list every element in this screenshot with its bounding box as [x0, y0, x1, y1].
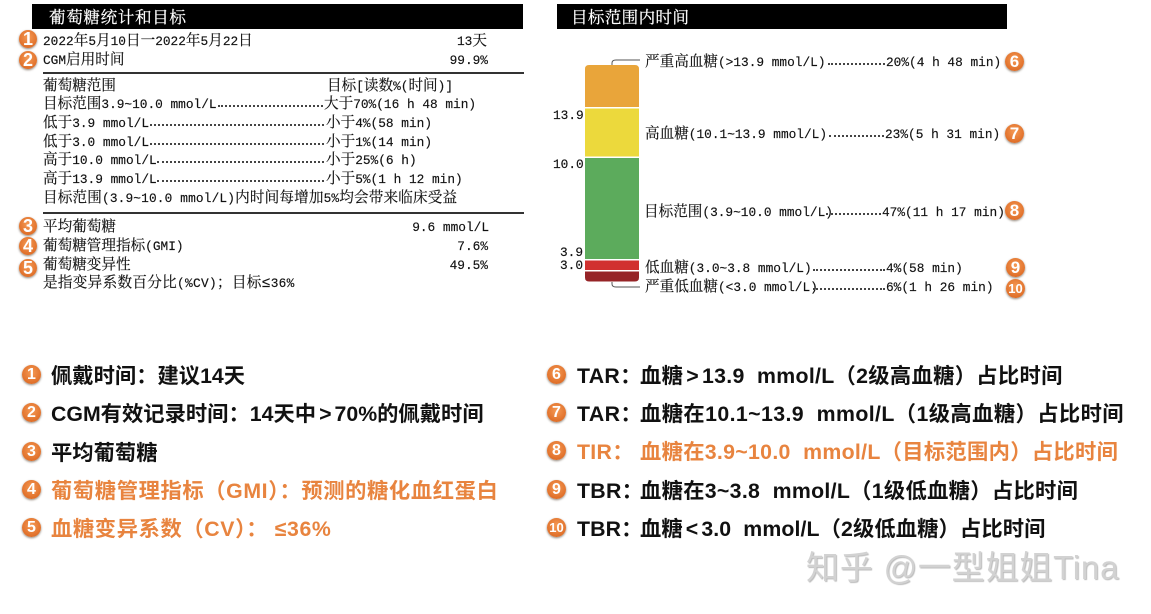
item 10: 10 [549, 520, 564, 535]
row: below 3.9: 小于4%(58 min) [326, 116, 432, 132]
row: glucose variability: 49.5% [450, 258, 488, 273]
label: target range: 目标范围(3.9~10.0 mmol/L) [644, 205, 833, 221]
item 2: 2 [27, 404, 36, 421]
item 2: CGM有效记录时间：14天中>70%的佩戴时间 [51, 402, 484, 426]
item 6: TAR： [577, 364, 642, 388]
label: hyperglycemia: 23%(5 h 31 min) [885, 127, 1000, 142]
row: clinical benefit note: 目标范围(3.9~10.0 mmol/L)内时间每增加5%均会带来临床受益 [43, 191, 457, 207]
row: below 3.0 [43, 133, 432, 151]
heading: glucose statistics [32, 4, 523, 29]
row: target range: 目标范围3.9~10.0 mmol/L [43, 97, 217, 113]
axis label 13.9: 13.9 [553, 108, 584, 123]
label: severe hyperglycemia: 严重高血糖(>13.9 mmol/L) [645, 55, 826, 71]
row: mean glucose [43, 218, 489, 236]
badge 4 [19, 237, 37, 255]
item 8: TIR： [577, 440, 634, 464]
list: right explanations [546, 364, 1124, 541]
watermark: 知乎 @一型姐姐Tina [806, 549, 1119, 586]
badge 3: 3 [23, 216, 33, 236]
badge 6 [1005, 52, 1024, 71]
badge 2: 2 [23, 50, 33, 70]
label: hypoglycemia: 4%(58 min) [886, 261, 963, 276]
label: severe hypoglycemia [645, 278, 994, 296]
list: left explanations [20, 364, 498, 541]
item 4: 葡萄糖管理指标（GMI）：预测的糖化血红蛋白 [51, 479, 498, 503]
row: glucose variability: 葡萄糖变异性 [43, 258, 131, 274]
row: above 10.0 [43, 151, 417, 169]
panel: glucose statistics and targets [32, 4, 524, 292]
row: range table header [43, 77, 453, 95]
heading: time in range: 目标范围内时间 [571, 4, 689, 28]
badge 2 [19, 51, 37, 69]
item 3: 平均葡萄糖 [51, 441, 158, 465]
badge 3 [19, 217, 37, 235]
badge 9 [1006, 258, 1025, 277]
row: GMI: 葡萄糖管理指标(GMI) [43, 239, 184, 255]
label: target range [644, 203, 1005, 221]
panel: time in range [553, 4, 1007, 296]
row: above 13.9: 高于13.9 mmol/L [43, 172, 157, 188]
item 7: 血糖在10.1~13.9 mmol/L（1级高血糖）占比时间 [640, 402, 1124, 426]
row: above 13.9: 小于5%(1 h 12 min) [326, 172, 463, 188]
item 7: 7 [552, 404, 561, 421]
item 5: 5 [27, 519, 36, 536]
label: severe hyperglycemia: 20%(4 h 48 min) [886, 55, 1001, 70]
badge 4: 4 [23, 236, 33, 256]
item 9: TBR： [577, 479, 643, 503]
heading: glucose statistics: 葡萄糖统计和目标 [49, 4, 187, 28]
row: below 3.9 [43, 114, 432, 132]
label: severe hypoglycemia: 严重低血糖(<3.0 mmol/L) [645, 280, 818, 296]
label: hyperglycemia: 高血糖(10.1~13.9 mmol/L) [645, 127, 827, 143]
heading: time in range [557, 4, 1007, 29]
badge 5 [19, 259, 37, 277]
row: CGM active time: CGM启用时间 [43, 53, 124, 69]
axis label 3.0: 3.0 [560, 258, 583, 273]
item 1: 1 [27, 366, 36, 383]
item 1: 佩戴时间：建议14天 [51, 364, 245, 388]
item 8: 血糖在3.9~10.0 mmol/L（目标范围内）占比时间 [640, 440, 1118, 464]
row: CGM active time: 99.9% [450, 53, 488, 68]
row: below 3.0: 低于3.0 mmol/L [43, 135, 149, 151]
axis label 3.9: 3.9 [560, 245, 583, 260]
label: severe hypoglycemia: 6%(1 h 26 min) [886, 280, 994, 295]
item 8: 8 [552, 442, 561, 459]
badge 1 [19, 30, 37, 48]
badge 5: 5 [23, 258, 33, 278]
label: hyperglycemia [645, 125, 1000, 143]
row: above 13.9 [43, 170, 463, 188]
row: mean glucose: 平均葡萄糖 [43, 220, 116, 236]
badge 6: 6 [1010, 52, 1019, 71]
badge 8 [1005, 201, 1024, 220]
label: hypoglycemia [645, 259, 963, 277]
item 7: TAR： [577, 402, 642, 426]
row: above 10.0: 小于25%(6 h) [326, 153, 417, 169]
row: target range: 大于70%(16 h 48 min) [324, 97, 476, 113]
badge 1: 1 [23, 29, 33, 49]
row: GMI [43, 237, 488, 255]
row: below 3.0: 小于1%(14 min) [326, 135, 432, 151]
item 6: 血糖>13.9 mmol/L（2级高血糖）占比时间 [640, 364, 1063, 388]
item 6: 6 [552, 366, 561, 383]
item 9: 9 [552, 481, 561, 498]
item 10: TBR： [577, 517, 642, 541]
badge 10: 10 [1008, 281, 1023, 296]
item 9: 血糖在3~3.8 mmol/L（1级低血糖）占比时间 [640, 479, 1078, 503]
badge 8: 8 [1010, 201, 1019, 220]
row: below 3.9: 低于3.9 mmol/L [43, 116, 149, 132]
item 4: 4 [27, 481, 36, 498]
axis label 10.0: 10.0 [553, 157, 584, 172]
row: above 10.0: 高于10.0 mmol/L [43, 153, 157, 169]
badge 10 [1006, 279, 1025, 298]
item 3: 3 [27, 443, 36, 460]
badge 7: 7 [1010, 124, 1019, 143]
row: date range: 2022年5月10日一2022年5月22日 [43, 34, 253, 50]
label: hypoglycemia: 低血糖(3.0~3.8 mmol/L) [645, 261, 812, 277]
row: date range [43, 32, 487, 50]
label: target range: 47%(11 h 17 min) [882, 205, 1005, 220]
stacked bar chart [585, 60, 640, 288]
row: target range [43, 95, 476, 113]
row: GMI: 7.6% [457, 239, 488, 254]
label: severe hyperglycemia [645, 53, 1001, 71]
row: range table header: 葡萄糖范围 [43, 79, 116, 95]
item 10: 血糖<3.0 mmol/L（2级低血糖）占比时间 [640, 517, 1046, 541]
row: date range: 13天 [457, 34, 487, 50]
badge 9: 9 [1011, 258, 1020, 277]
row: CGM active time [43, 51, 488, 69]
row: mean glucose: 9.6 mmol/L [412, 220, 489, 235]
row: CV note: 是指变异系数百分比(%CV)；目标≤36% [43, 276, 295, 292]
item 5: 血糖变异系数（CV）： ≤36% [51, 517, 331, 541]
badge 7 [1005, 124, 1024, 143]
row: glucose variability [43, 256, 488, 274]
row: range table header: 目标[读数%(时间)] [327, 79, 453, 95]
